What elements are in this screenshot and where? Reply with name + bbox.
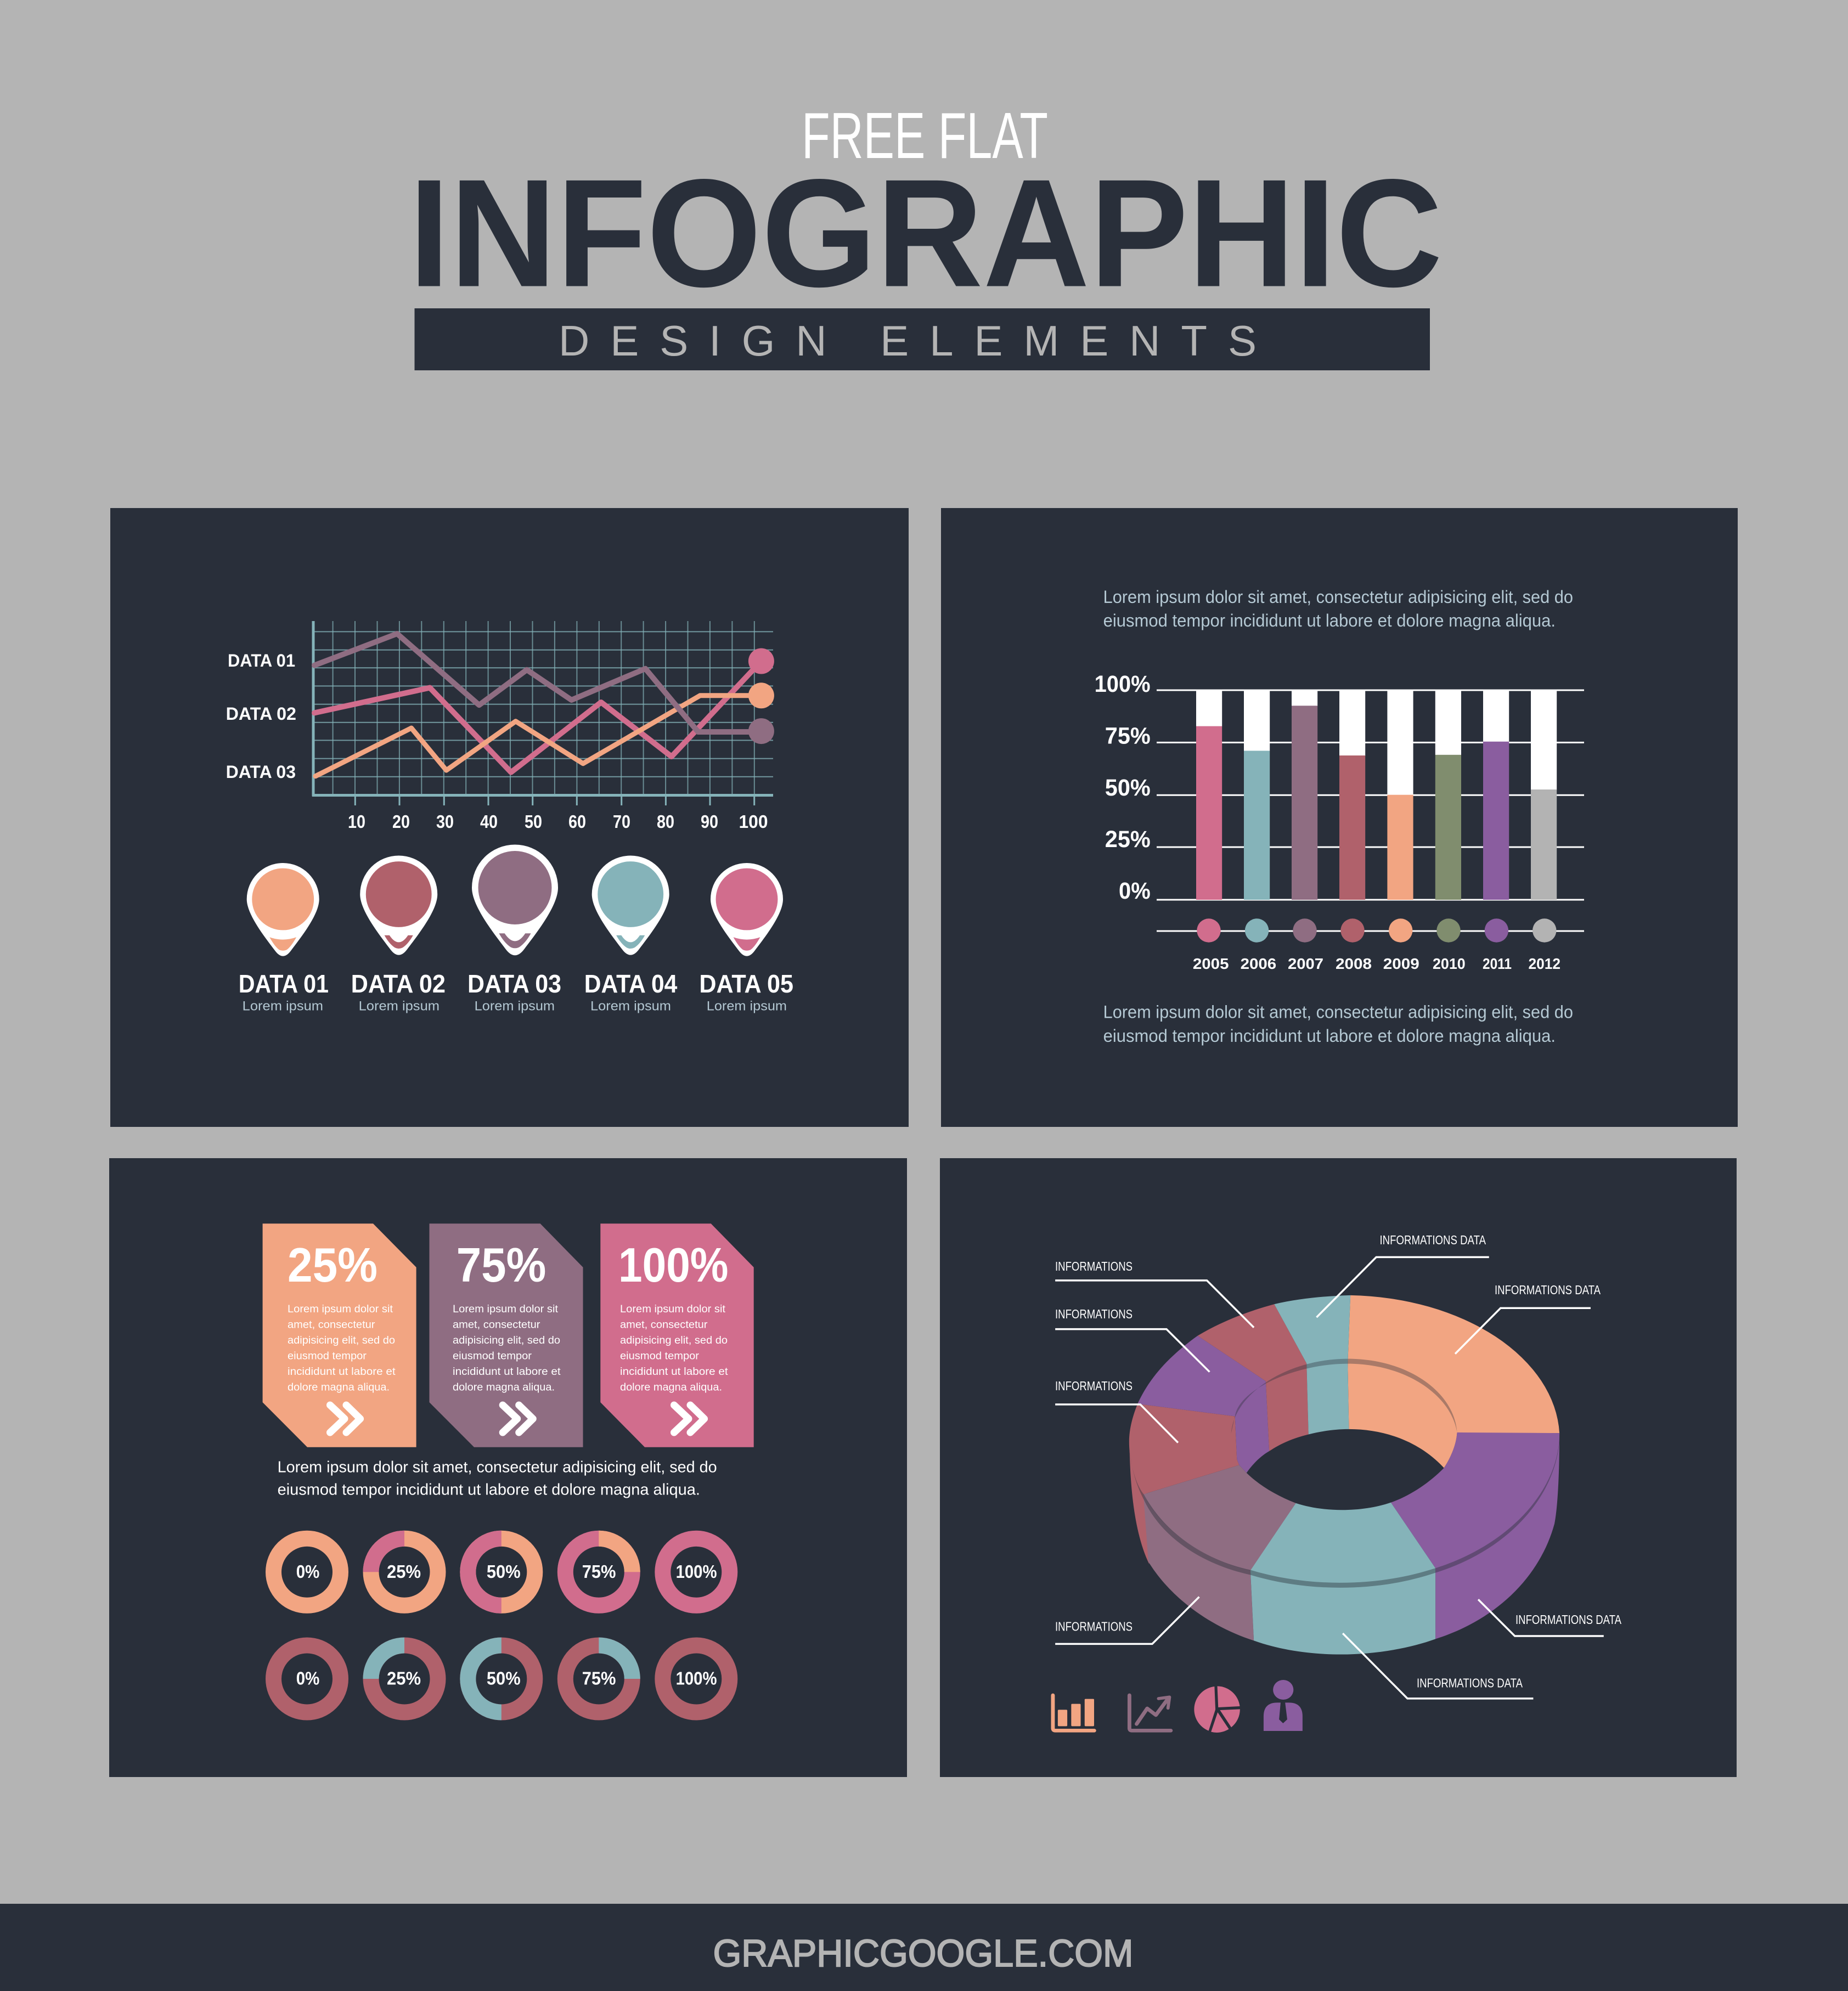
donut 50% <box>468 1538 535 1605</box>
series: data 03 line <box>315 696 761 776</box>
y axis labels: DATA 02 <box>226 704 296 724</box>
donut labels <box>1055 1233 1622 1690</box>
panel: bar chart <box>941 508 1738 1127</box>
bar 2005 <box>1196 690 1222 900</box>
subtitle bar <box>415 308 1430 370</box>
3d donut <box>1055 1257 1604 1699</box>
card 25%: amet, consectetur <box>288 1319 375 1330</box>
panel: 3d donut chart <box>940 1158 1737 1777</box>
top: rose segment left <box>1129 1404 1239 1494</box>
x axis labels: 70 <box>613 811 630 832</box>
y axis labels: 75% <box>1105 723 1151 749</box>
donut labels: INFORMATIONS <box>1055 1259 1133 1273</box>
top: orange segment <box>1348 1295 1559 1468</box>
line chart <box>226 621 774 832</box>
series: data 01 line <box>314 634 761 732</box>
x axis labels: 30 <box>436 811 454 832</box>
icon: growth chart <box>1129 1695 1171 1730</box>
donut 0%: 0% <box>296 1561 319 1582</box>
pin 3: DATA 03 <box>467 969 561 998</box>
card 25% <box>263 1223 416 1447</box>
donut 100%: 100% <box>676 1668 717 1689</box>
card 100%: dolore magna aliqua. <box>620 1382 722 1394</box>
y axis labels: DATA 01 <box>228 651 295 670</box>
x axis labels: 100 <box>739 811 768 832</box>
top: purple segment left <box>1137 1336 1269 1473</box>
bar 2007 <box>1292 690 1317 900</box>
wall: purple <box>1435 1433 1559 1639</box>
icon row <box>1053 1680 1303 1733</box>
pin 4 <box>584 856 678 1014</box>
pin 5 <box>699 863 793 1014</box>
donut row 1 <box>273 1538 730 1605</box>
timeline with dots <box>1157 918 1584 943</box>
donut labels: INFORMATIONS DATA <box>1379 1233 1486 1247</box>
top paragraph: eiusmod tempor incididunt ut labore et dolore magna aliqua. <box>1103 611 1556 630</box>
bottom paragraph <box>1103 1002 1573 1046</box>
y axis labels: 25% <box>1105 826 1151 853</box>
donut 25%: 25% <box>387 1561 421 1582</box>
top paragraph: Lorem ipsum dolor sit amet, consectetur adipisicing elit, sed do <box>1103 587 1573 607</box>
year labels: 2012 <box>1529 955 1560 972</box>
pin 2: Lorem ipsum <box>359 999 440 1014</box>
pin 5: DATA 05 <box>699 969 793 998</box>
panel: line chart and pins <box>110 508 909 1127</box>
card 100%: incididunt ut labore et <box>620 1366 728 1378</box>
title: infographic: INFOGRAPHIC <box>409 148 1443 319</box>
title: free flat: FREE FLAT <box>802 99 1048 172</box>
x axis labels: 90 <box>701 811 718 832</box>
card 75%: adipisicing elit, sed do <box>453 1335 560 1346</box>
bar 2011 <box>1483 690 1509 900</box>
paragraph <box>278 1458 717 1499</box>
top: teal segment upper <box>1274 1295 1350 1434</box>
pin 3: Lorem ipsum <box>475 999 555 1014</box>
pin 1 <box>239 863 329 1014</box>
donut row 2 <box>273 1645 730 1712</box>
top paragraph <box>1103 587 1573 630</box>
top: mauve segment <box>1143 1465 1296 1571</box>
year labels: 2007 <box>1288 955 1323 972</box>
x axis labels: 50 <box>525 811 542 832</box>
card 100%: adipisicing elit, sed do <box>620 1335 728 1346</box>
panel: cards and donuts <box>109 1158 907 1777</box>
top: teal segment <box>1250 1503 1435 1583</box>
wall: teal <box>1250 1568 1435 1655</box>
footer: GRAPHICGOOGLE.COM <box>713 1932 1134 1975</box>
bottom paragraph: eiusmod tempor incididunt ut labore et dolore magna aliqua. <box>1103 1026 1556 1046</box>
icon: pie chart <box>1194 1686 1240 1733</box>
card 25%: adipisicing elit, sed do <box>288 1335 395 1346</box>
year labels <box>1193 955 1560 972</box>
donut labels: INFORMATIONS DATA <box>1515 1612 1622 1627</box>
pin 2: DATA 02 <box>351 969 446 998</box>
donut 0% <box>273 1645 340 1712</box>
donut 0% <box>273 1538 340 1605</box>
series: data 02 line <box>314 661 761 772</box>
card 25%: Lorem ipsum dolor sit <box>288 1304 393 1315</box>
card 100%: amet, consectetur <box>620 1319 708 1330</box>
card 100% <box>600 1223 754 1447</box>
wall: rose sliver <box>1130 1448 1149 1564</box>
inner rim shadow <box>1231 1359 1457 1434</box>
paragraph: eiusmod tempor incididunt ut labore et dolore magna aliqua. <box>278 1481 700 1499</box>
card 100%: Lorem ipsum dolor sit <box>620 1304 726 1315</box>
pin 4: DATA 04 <box>584 969 678 998</box>
card 100%: eiusmod tempor <box>620 1351 700 1362</box>
pin 1: DATA 01 <box>239 969 329 998</box>
donut labels: INFORMATIONS <box>1055 1379 1133 1393</box>
top: purple segment <box>1391 1432 1559 1568</box>
donut 100%: 100% <box>676 1561 717 1582</box>
y axis labels: 0% <box>1119 878 1151 904</box>
card 100%: 100% <box>618 1238 729 1292</box>
outer rim shadow <box>1130 1433 1559 1588</box>
year labels: 2010 <box>1433 955 1466 972</box>
card 75%: Lorem ipsum dolor sit <box>453 1304 559 1315</box>
x axis labels: 40 <box>480 811 498 832</box>
donut 100% <box>663 1538 730 1605</box>
donut 75% <box>565 1645 632 1712</box>
donut 25%: 25% <box>387 1668 421 1689</box>
card 25%: 25% <box>288 1238 378 1292</box>
donut 75%: 75% <box>582 1668 616 1689</box>
card 75%: eiusmod tempor <box>453 1351 532 1362</box>
bar 2012 <box>1531 690 1557 900</box>
donut labels: INFORMATIONS <box>1055 1307 1133 1321</box>
footer <box>0 1904 1848 1991</box>
donut 0%: 0% <box>296 1668 319 1689</box>
subtitle bar: DESIGN ELEMENTS <box>559 317 1257 365</box>
bar 2010 <box>1435 690 1461 900</box>
donut 50% <box>468 1645 535 1712</box>
year labels: 2011 <box>1483 955 1512 972</box>
pin 1: Lorem ipsum <box>243 999 323 1014</box>
year labels: 2006 <box>1241 955 1276 972</box>
donut 75% <box>565 1538 632 1605</box>
pin 5: Lorem ipsum <box>707 999 787 1014</box>
donut 50%: 50% <box>487 1561 521 1582</box>
card 75%: amet, consectetur <box>453 1319 540 1330</box>
donut labels: INFORMATIONS <box>1055 1619 1133 1633</box>
y axis labels: 100% <box>1095 671 1151 697</box>
y axis labels <box>1095 671 1151 904</box>
card 25%: dolore magna aliqua. <box>288 1382 390 1394</box>
x axis labels: 80 <box>657 811 674 832</box>
donut 50%: 50% <box>487 1668 521 1689</box>
bottom paragraph: Lorem ipsum dolor sit amet, consectetur adipisicing elit, sed do <box>1103 1002 1573 1022</box>
card 75%: 75% <box>457 1238 546 1292</box>
donut 25% <box>371 1538 438 1605</box>
x axis labels: 20 <box>392 811 410 832</box>
wall: mauve <box>1143 1494 1254 1640</box>
pin 4: Lorem ipsum <box>590 999 671 1014</box>
y axis labels <box>226 651 296 782</box>
year labels: 2009 <box>1383 955 1419 972</box>
donut 75%: 75% <box>582 1561 616 1582</box>
card 75%: dolore magna aliqua. <box>453 1382 555 1394</box>
series end dots <box>748 648 774 744</box>
title block <box>409 99 1443 370</box>
year labels: 2005 <box>1193 955 1229 972</box>
bar 2009 <box>1387 690 1413 900</box>
x axis labels <box>348 811 768 832</box>
x axis labels: 60 <box>568 811 586 832</box>
x axis labels: 10 <box>348 811 365 832</box>
year labels: 2008 <box>1336 955 1372 972</box>
y axis labels: DATA 03 <box>226 762 296 782</box>
card 25%: eiusmod tempor <box>288 1351 367 1362</box>
top: rose segment upper <box>1198 1304 1309 1451</box>
bar 2008 <box>1339 690 1365 900</box>
donut labels: INFORMATIONS DATA <box>1417 1676 1523 1690</box>
pin 2 <box>351 856 446 1014</box>
icon: person <box>1264 1680 1303 1731</box>
card 75% <box>429 1223 583 1447</box>
y axis labels: 50% <box>1105 775 1151 801</box>
donut 100% <box>663 1645 730 1712</box>
leader lines <box>1055 1257 1604 1699</box>
bar 2006 <box>1244 690 1270 900</box>
donut labels: INFORMATIONS DATA <box>1495 1283 1601 1297</box>
pin 3 <box>467 845 561 1014</box>
paragraph: Lorem ipsum dolor sit amet, consectetur adipisicing elit, sed do <box>278 1458 717 1476</box>
icon: bar chart <box>1053 1695 1094 1730</box>
donut 25% <box>371 1645 438 1712</box>
card 75%: incididunt ut labore et <box>453 1366 561 1378</box>
card 25%: incididunt ut labore et <box>288 1366 396 1378</box>
bar chart <box>1095 671 1584 972</box>
